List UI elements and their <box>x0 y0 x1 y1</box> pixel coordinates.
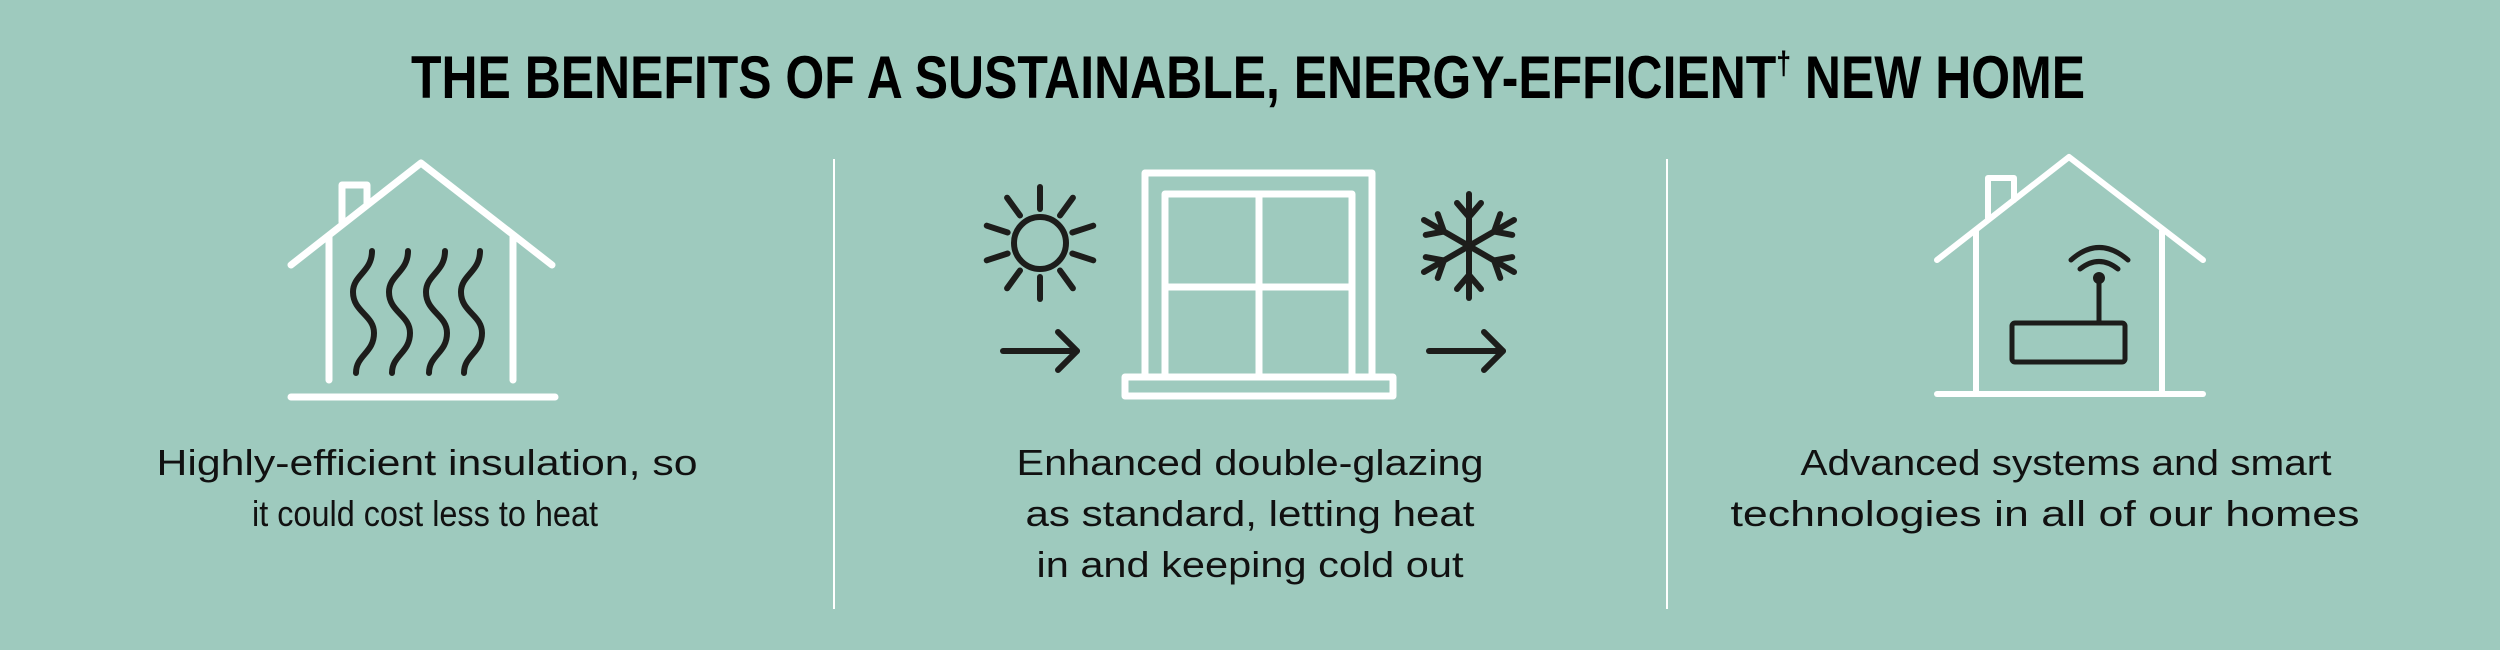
panel: insulation <box>156 163 698 534</box>
title: † <box>1776 45 1791 81</box>
icon: window <box>1125 173 1393 396</box>
text: double glazing <box>1016 442 1484 585</box>
text: smart technologies: technologies in all of our homes <box>1730 493 2360 534</box>
icon: house with router <box>1937 157 2203 394</box>
title: THE BENEFITS OF A SUSTAINABLE, ENERGY-EFFICIENT <box>411 44 2052 111</box>
text: double glazing: in and keeping cold out <box>1036 544 1464 585</box>
panel: smart technologies <box>1730 157 2360 534</box>
text: double glazing: as standard, letting heat <box>1026 493 1474 534</box>
icon: house with heat waves <box>291 163 555 397</box>
arrow: left <box>1003 332 1077 370</box>
arrow: right <box>1429 332 1503 370</box>
title: NEW HOME <box>1791 44 2085 111</box>
text: insulation: Highly-efficient insulation, so <box>156 442 698 483</box>
text: insulation: it could cost less to heat <box>252 493 598 534</box>
icon: snowflake <box>1418 194 1520 298</box>
text: smart technologies <box>1730 442 2360 534</box>
icon: sun <box>987 187 1093 299</box>
panel: double glazing <box>987 173 1520 585</box>
text: smart technologies: Advanced systems and smart <box>1800 442 2332 483</box>
text: double glazing: Enhanced double-glazing <box>1016 442 1484 483</box>
text: insulation <box>156 442 698 534</box>
